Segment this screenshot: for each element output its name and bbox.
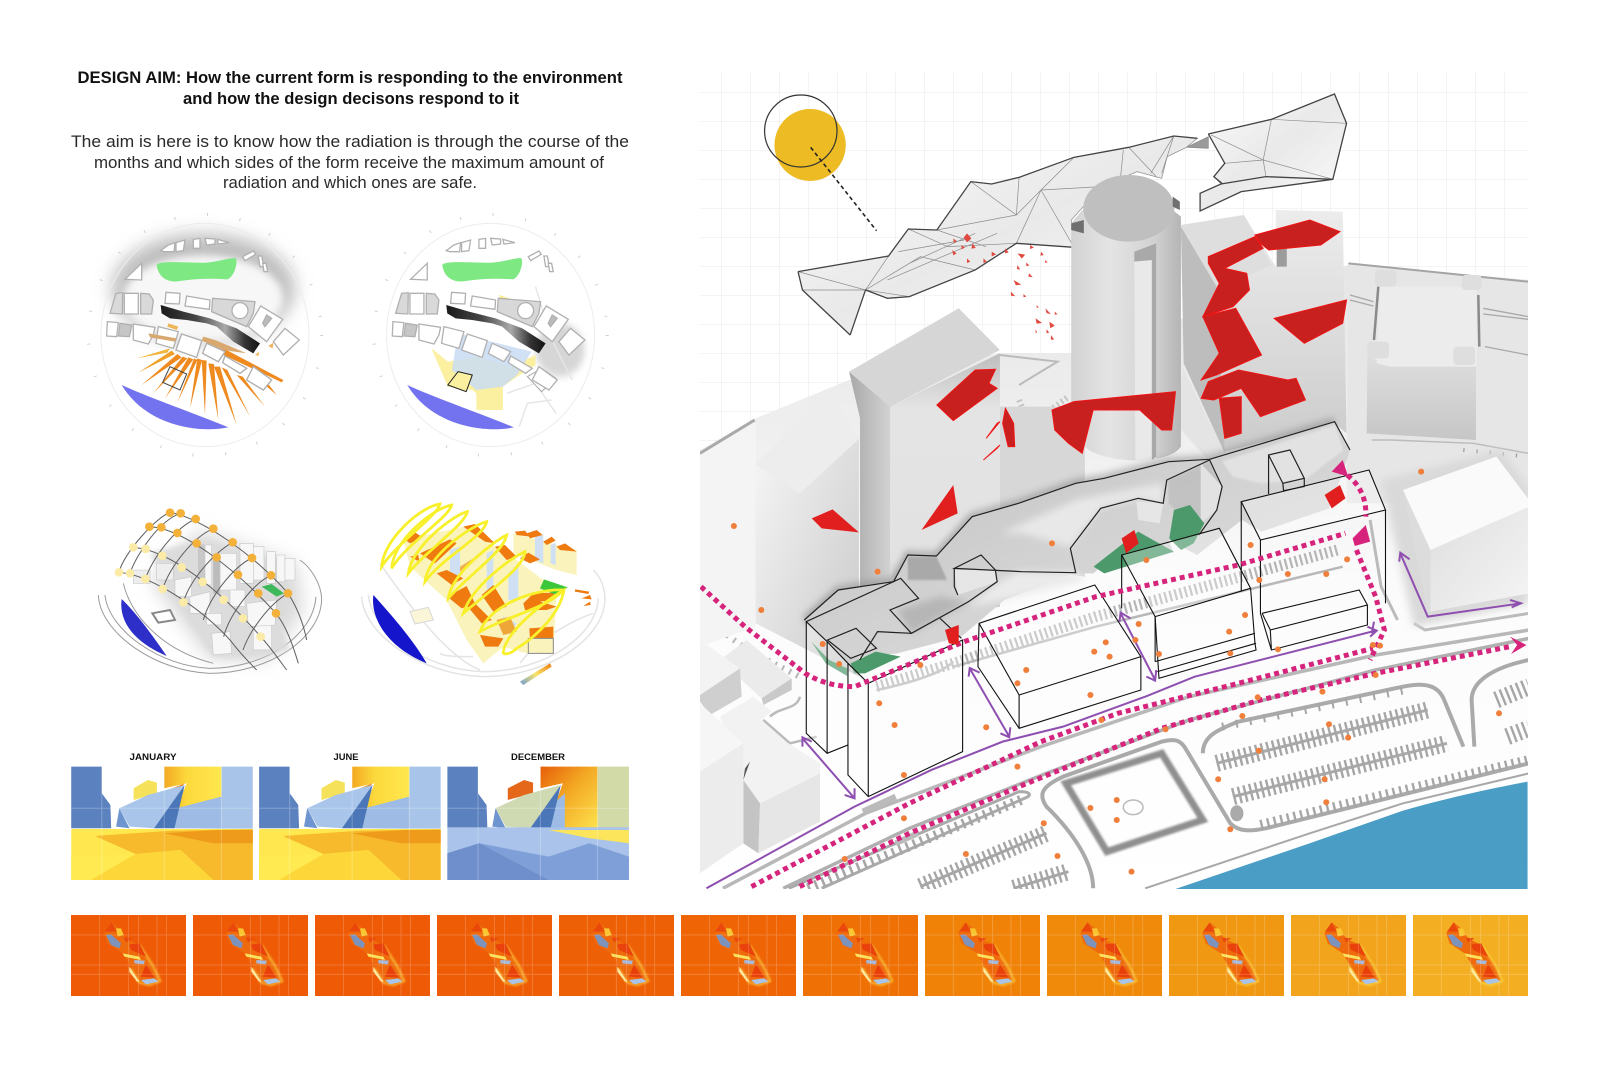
diagram: radiation analysis plan — [374, 214, 607, 456]
right cube building — [1381, 450, 1529, 627]
title: DESIGN AIM: How the current form is responding to the environment — [78, 69, 623, 87]
body text: The aim is here is to know how the radiation is through the course of the — [71, 133, 629, 151]
site ground detail: roads, parking, water, plaza — [701, 520, 1529, 889]
right tower — [1178, 210, 1347, 463]
diagram: radiation on massing dome — [362, 504, 605, 685]
diagram: radiation rays plan — [88, 214, 322, 456]
diagram: sun path dome — [98, 508, 322, 673]
far right building and slab — [1347, 263, 1528, 503]
falling red particles — [952, 233, 1057, 340]
month labels: DECEMBER — [511, 752, 565, 763]
title: and how the design decisons respond to it — [183, 90, 520, 108]
heatmap: December — [447, 767, 629, 880]
orange survey dots — [731, 469, 1502, 875]
body text: radiation and which ones are safe. — [223, 174, 477, 192]
month labels: JUNE — [334, 752, 358, 763]
heatmap strip: twelve months — [71, 915, 1528, 996]
massing wireframes — [806, 470, 1385, 797]
canopy roof mesh — [798, 94, 1347, 335]
green landscape patches — [811, 505, 1204, 676]
purple route and distance arrows — [706, 553, 1521, 888]
pink circulation routes — [701, 470, 1510, 887]
body text: months and which sides of the form receive the maximum amount of — [94, 154, 604, 172]
podium wave mass — [804, 422, 1350, 676]
lower left buildings — [700, 640, 820, 873]
ground plane — [700, 265, 1529, 890]
left building far — [700, 393, 859, 677]
lower red panels and markers — [812, 485, 1345, 645]
central cylindrical tower — [1071, 175, 1181, 460]
month labels — [130, 752, 565, 763]
red radiation panels — [937, 220, 1347, 460]
body text — [71, 133, 629, 192]
title — [78, 69, 623, 108]
heatmap: January — [71, 767, 253, 880]
building mass centre left — [1000, 407, 1085, 577]
heatmap: June — [259, 767, 441, 880]
panel: 3D site axonometric — [700, 71, 1529, 890]
month labels: JANUARY — [130, 752, 177, 763]
tall left building — [849, 308, 1000, 630]
pink arrowheads — [1332, 460, 1526, 654]
sun — [765, 95, 876, 231]
